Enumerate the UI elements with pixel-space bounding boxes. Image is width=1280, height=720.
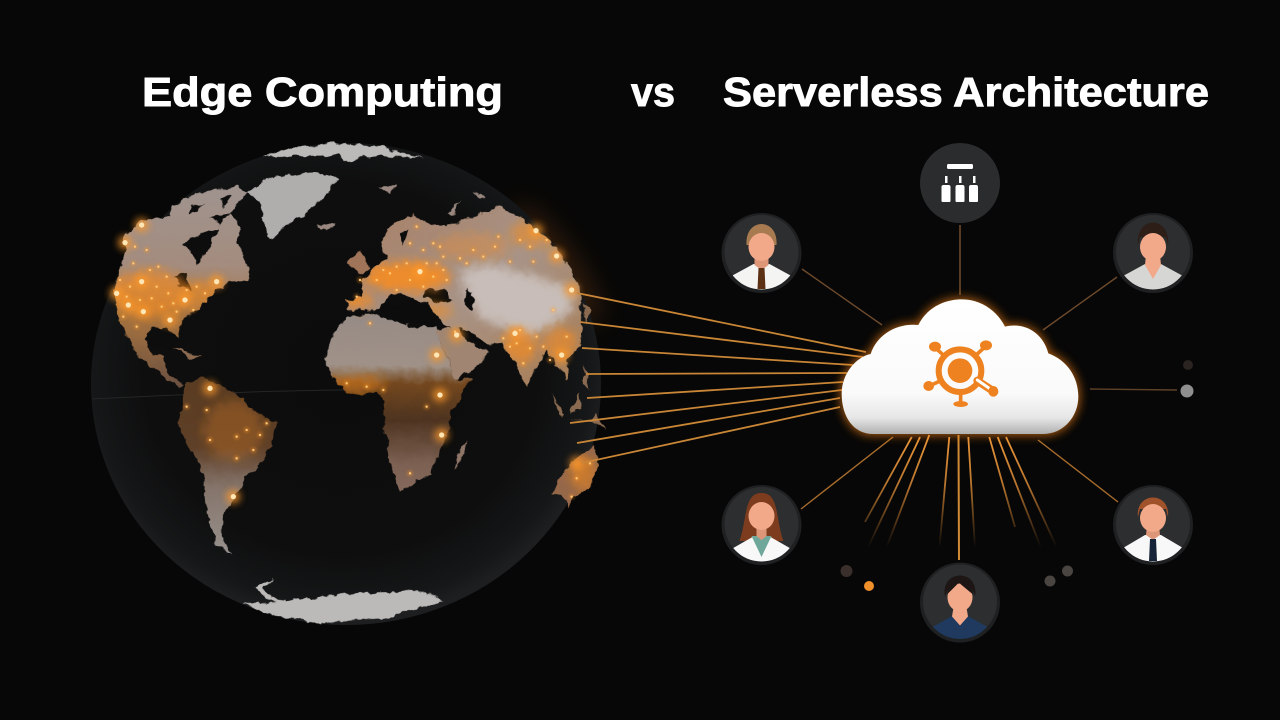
node: man with brown tie bbox=[722, 213, 802, 293]
africa bbox=[325, 312, 473, 492]
hudson bay and channels bbox=[147, 196, 232, 348]
iceland and svalbard bbox=[317, 185, 487, 232]
node: servers icon bbox=[920, 143, 1000, 223]
line to bottom left node bbox=[801, 437, 893, 509]
cloud outer glow bbox=[842, 299, 1078, 434]
equator line bbox=[92, 390, 450, 399]
line to right dot bbox=[1090, 389, 1177, 390]
arctic ice bbox=[263, 143, 423, 162]
heading: edge computing: Edge Computing bbox=[142, 69, 503, 115]
south east asia islands bbox=[552, 303, 607, 430]
line to bottom node bbox=[958, 435, 960, 560]
node: man with navy tie bbox=[1113, 485, 1193, 565]
light halos bbox=[117, 225, 577, 497]
heading: vs: vs bbox=[631, 69, 675, 115]
line to top node bbox=[959, 225, 961, 295]
antarctica bbox=[243, 578, 443, 624]
orange halo behind asia bbox=[515, 215, 590, 320]
greenland bbox=[247, 172, 338, 240]
south america bbox=[178, 377, 277, 553]
floating dots bbox=[840, 360, 1194, 591]
line to bottom right node bbox=[1038, 440, 1118, 502]
australia bbox=[552, 445, 598, 507]
line to top right node bbox=[1043, 277, 1117, 330]
caribbean islands bbox=[173, 347, 203, 359]
node: woman in lab coat bbox=[722, 485, 802, 565]
eurasia bbox=[347, 205, 582, 387]
node: person in navy jacket bbox=[920, 562, 1000, 642]
globe bbox=[91, 143, 607, 625]
title bbox=[142, 69, 1209, 115]
bright city cores bbox=[117, 225, 572, 497]
small city lights bbox=[120, 227, 590, 497]
connection lines: cloud to nodes bbox=[801, 225, 1177, 562]
land masses bbox=[110, 143, 607, 624]
cloud body bbox=[842, 299, 1078, 434]
north america bbox=[113, 187, 248, 387]
fading data rays bbox=[862, 435, 1058, 562]
line to top left node bbox=[802, 269, 882, 325]
cloud bbox=[842, 299, 1078, 434]
world map bbox=[110, 143, 607, 624]
globe disc bbox=[91, 143, 601, 625]
madagascar bbox=[453, 440, 467, 468]
british isles bbox=[347, 250, 370, 273]
inland seas bbox=[380, 230, 487, 380]
node: man with open collar bbox=[1113, 213, 1193, 293]
central asia highlands bbox=[460, 263, 573, 337]
connection lines: globe to cloud bbox=[570, 293, 866, 463]
city glow clipped to land bbox=[110, 220, 597, 490]
small light halos bbox=[120, 227, 590, 497]
arabia bbox=[437, 327, 488, 378]
icon: orange hub bbox=[923, 340, 998, 407]
heading: serverless architecture: Serverless Architecture bbox=[723, 69, 1209, 115]
